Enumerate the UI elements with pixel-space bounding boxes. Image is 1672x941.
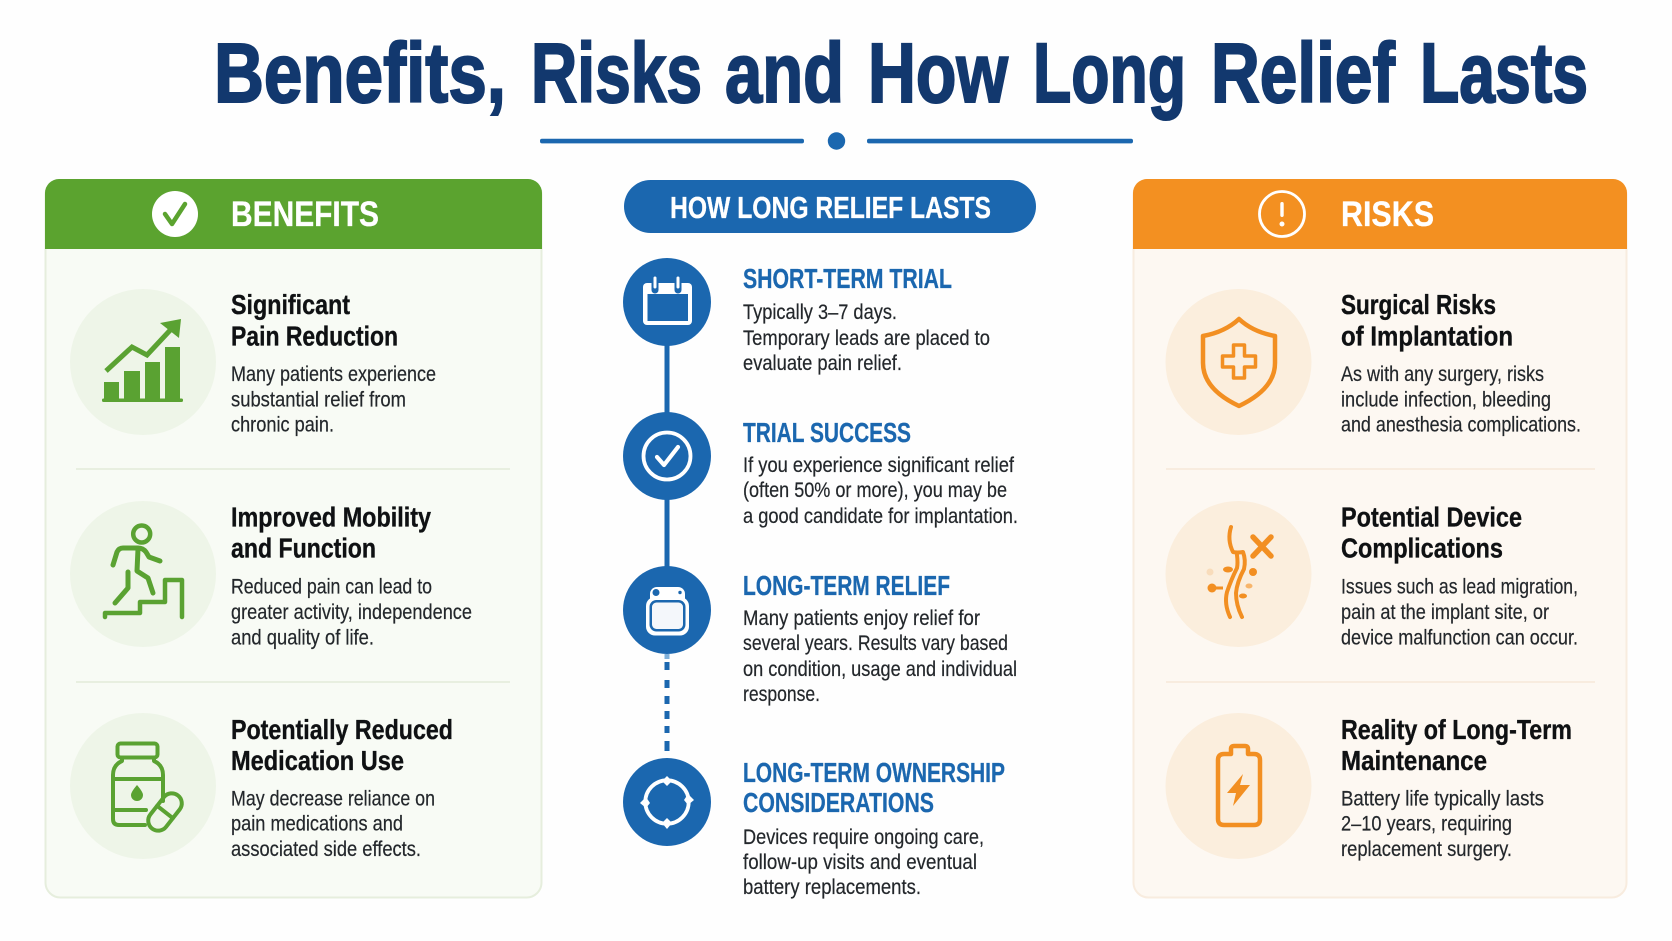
step description: Typically 3–7 days. <box>743 300 897 324</box>
step description: response. <box>743 682 820 706</box>
benefit item: improved mobility <box>70 501 472 650</box>
item description: Many patients experience <box>231 362 436 386</box>
item title <box>1341 714 1572 776</box>
icon: maintenance cycle <box>623 758 711 846</box>
step description: Many patients enjoy relief for <box>743 606 980 630</box>
icon: nerve with lead and X <box>1166 501 1312 647</box>
panel: how long relief lasts <box>623 180 1036 899</box>
title <box>214 26 1588 120</box>
step description <box>743 606 1017 706</box>
item description <box>1341 574 1578 650</box>
step: short-term trial <box>623 258 990 375</box>
icon: implant device <box>623 566 711 654</box>
step description: evaluate pain relief. <box>743 351 902 375</box>
risk item: long-term maintenance <box>1166 713 1572 861</box>
icon: warning circle <box>1260 192 1304 236</box>
step description: several years. Results vary based <box>743 631 1008 655</box>
benefits heading: BENEFITS <box>231 195 379 234</box>
benefits header bar <box>45 179 542 249</box>
icon: pill bottle and capsule <box>70 713 216 859</box>
step description: (often 50% or more), you may be <box>743 478 1007 502</box>
item title: Improved Mobility <box>231 502 432 532</box>
step heading: SHORT-TERM TRIAL <box>743 263 952 294</box>
step description: a good candidate for implantation. <box>743 504 1018 528</box>
item description: pain at the implant site, or <box>1341 600 1549 624</box>
item description: include infection, bleeding <box>1341 388 1551 412</box>
item description: and anesthesia complications. <box>1341 412 1581 436</box>
icon: check circle <box>623 412 711 500</box>
title: Long <box>1033 26 1186 120</box>
step description: Temporary leads are placed to <box>743 326 990 350</box>
step heading: LONG-TERM OWNERSHIP <box>743 757 1005 788</box>
risk item: device complications <box>1166 501 1578 650</box>
item description: replacement surgery. <box>1341 837 1512 861</box>
step: long-term relief <box>623 566 1017 706</box>
step description: battery replacements. <box>743 875 921 899</box>
item description <box>231 786 435 861</box>
step: trial success <box>623 412 1018 528</box>
item title: Surgical Risks <box>1341 289 1496 320</box>
panel: benefits <box>45 179 542 898</box>
step heading <box>743 757 1005 818</box>
item description: pain medications and <box>231 812 403 836</box>
step heading: TRIAL SUCCESS <box>743 417 911 448</box>
item description <box>231 574 472 650</box>
item description: As with any surgery, risks <box>1341 362 1544 386</box>
item title: Pain Reduction <box>231 320 398 352</box>
icon: calendar <box>623 258 711 346</box>
item description: associated side effects. <box>231 837 421 861</box>
timeline connector <box>664 340 670 751</box>
step description: Devices require ongoing care, <box>743 825 984 849</box>
icon: battery with bolt <box>1166 713 1312 859</box>
item description: Battery life typically lasts <box>1341 786 1544 810</box>
item title: of Implantation <box>1341 320 1513 352</box>
title: Relief <box>1211 26 1396 120</box>
panel: risks <box>1133 179 1627 898</box>
item description: device malfunction can occur. <box>1341 626 1578 650</box>
item title <box>1341 502 1522 564</box>
step description <box>743 300 990 375</box>
item description: 2–10 years, requiring <box>1341 812 1512 836</box>
step heading: LONG-TERM RELIEF <box>743 570 950 601</box>
item description: substantial relief from <box>231 388 406 412</box>
item description: and quality of life. <box>231 626 374 650</box>
benefit item: reduced medication <box>70 713 453 861</box>
heading pill <box>624 180 1036 233</box>
item title: Maintenance <box>1341 745 1487 776</box>
icon: person climbing stairs <box>70 501 216 647</box>
item description: May decrease reliance on <box>231 786 435 810</box>
item title: Medication Use <box>231 745 404 776</box>
icon: rising bar chart <box>70 289 216 435</box>
icon: shield with cross <box>1166 289 1312 435</box>
item title: Complications <box>1341 532 1503 564</box>
risks heading: RISKS <box>1341 195 1434 234</box>
item title <box>1341 289 1513 352</box>
step description <box>743 825 984 899</box>
step: long-term ownership <box>623 757 1005 899</box>
step description: follow-up visits and eventual <box>743 850 977 874</box>
item description: greater activity, independence <box>231 600 472 624</box>
item title: Potentially Reduced <box>231 714 453 745</box>
title: Risks <box>531 26 702 120</box>
heading pill: HOW LONG RELIEF LASTS <box>670 190 991 225</box>
item title <box>231 714 453 776</box>
item description: chronic pain. <box>231 412 334 436</box>
title: and <box>725 26 844 120</box>
item title: Significant <box>231 289 350 320</box>
title: Lasts <box>1420 26 1588 120</box>
item title <box>231 502 432 564</box>
item description: Reduced pain can lead to <box>231 574 432 598</box>
step description: If you experience significant relief <box>743 453 1014 477</box>
risks header bar <box>1133 179 1627 249</box>
item title: and Function <box>231 532 376 564</box>
title: Benefits, <box>214 26 506 120</box>
step description: on condition, usage and individual <box>743 657 1017 681</box>
step heading: CONSIDERATIONS <box>743 787 934 818</box>
benefit item: significant pain reduction <box>70 289 436 436</box>
item title: Potential Device <box>1341 502 1522 532</box>
item title: Reality of Long-Term <box>1341 714 1572 745</box>
icon: check badge <box>152 191 198 237</box>
item description: Issues such as lead migration, <box>1341 574 1578 598</box>
risk item: surgical risks <box>1166 289 1581 436</box>
item description <box>1341 362 1581 436</box>
item description <box>231 362 436 436</box>
step description <box>743 453 1018 528</box>
title: How <box>868 26 1009 120</box>
title divider <box>540 132 1133 150</box>
item description <box>1341 786 1544 861</box>
item title <box>231 289 398 352</box>
